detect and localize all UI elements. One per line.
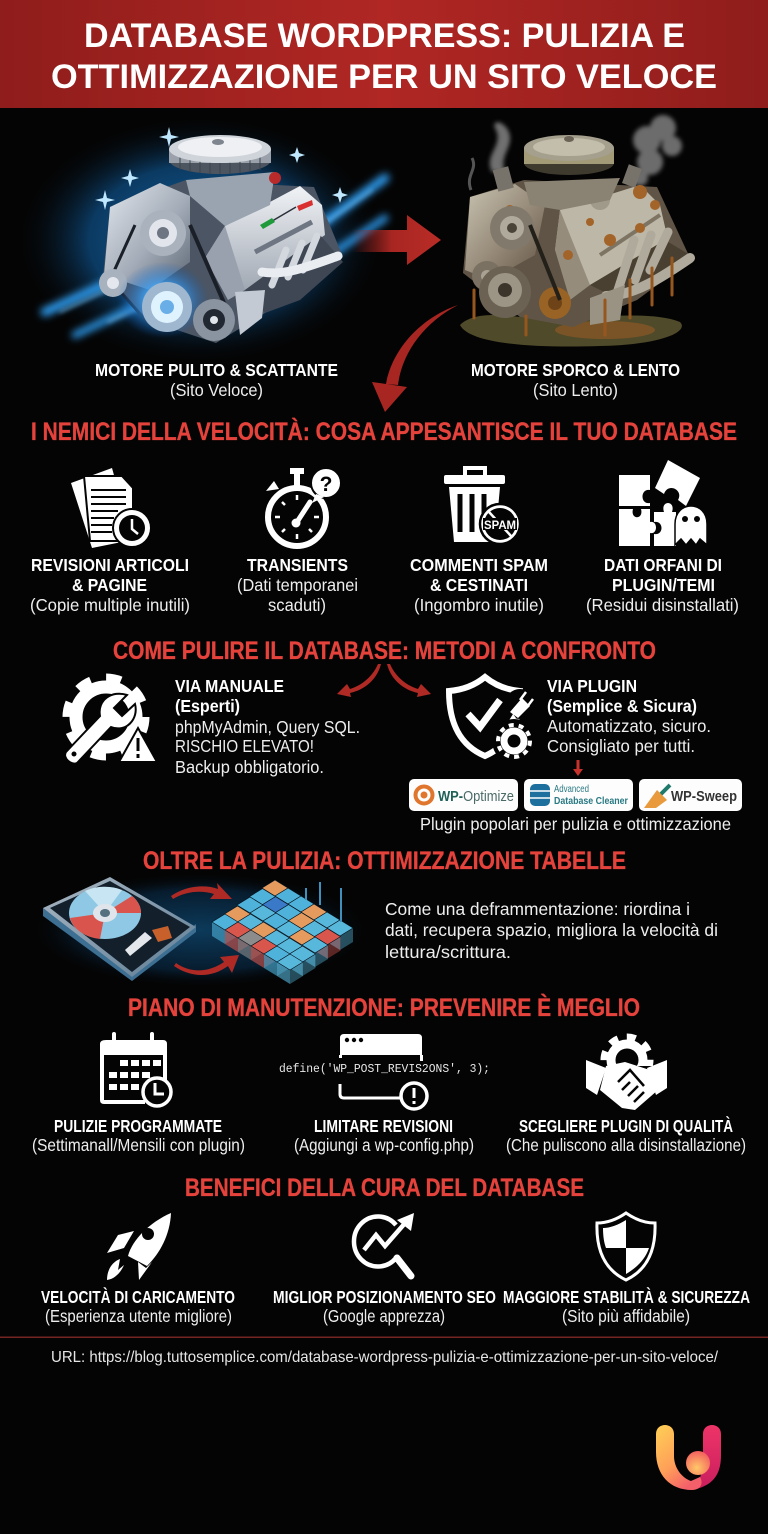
icon: calendar with clock [100, 1034, 171, 1106]
panel: manual method: phpMyAdmin, Query SQL. [175, 717, 360, 737]
panel: scheduled cleaning [32, 1034, 245, 1155]
caption: clean engine [95, 360, 338, 400]
text: defragmentation analogy: lettura/scrittura. [385, 942, 511, 962]
icon: gear and wrench with warning [65, 678, 157, 764]
panel: loading speed: (Esperienza utente migliore) [45, 1306, 232, 1326]
panel: orphan data: (Residui disinstallati) [586, 595, 739, 615]
caption: clean engine: MOTORE PULITO & SCATTANTE [95, 360, 338, 380]
panel: limit revisions [279, 1034, 490, 1155]
hard drive [43, 877, 196, 981]
title banner [0, 0, 768, 108]
icon: rocket [107, 1213, 171, 1280]
title banner: DATABASE WORDPRESS: PULIZIA E [84, 17, 685, 55]
icon: shield with check, plug and gear [449, 677, 536, 763]
heading: cleaning methods: COME PULIRE IL DATABASE: METODI A CONFRONTO [113, 637, 656, 665]
caption: dirty engine: MOTORE SPORCO & LENTO [471, 360, 680, 380]
caption: dirty engine [471, 360, 680, 400]
plugin card: Advanced Database Cleaner: Database Cleaner [554, 795, 628, 807]
panel: SEO: MIGLIOR POSIZIONAMENTO SEO [273, 1287, 496, 1307]
plugin card: WP-Sweep: WP-Sweep [671, 788, 737, 805]
icon: stopwatch with question mark: ? [320, 473, 332, 496]
panel: stability [503, 1213, 750, 1326]
panel: manual method: VIA MANUALE [175, 676, 284, 696]
plugin card: WP-Sweep [639, 779, 742, 811]
caption: clean engine: (Sito Veloce) [170, 380, 263, 400]
panel: orphan data: PLUGIN/TEMI [612, 575, 715, 595]
arrow: lower [174, 955, 239, 975]
arrow: curved down to enemies section [372, 305, 458, 412]
panel: plugin method: Automatizzato, sicuro. [547, 716, 711, 736]
panel: revisions: & PAGINE [72, 575, 147, 595]
arrow: to manual [337, 664, 381, 697]
panel: plugin method: VIA PLUGIN [547, 676, 637, 696]
panel: spam [410, 468, 548, 615]
illustration: hard drive defragmented to blocks [30, 872, 370, 988]
caption: dirty engine: (Sito Lento) [533, 380, 618, 400]
plugin card: WP-Optimize [409, 779, 518, 811]
panel: SEO [273, 1213, 496, 1326]
panel: spam: & CESTINATI [430, 575, 528, 595]
heading: maintenance plan: PIANO DI MANUTENZIONE: PREVENIRE È MEGLIO [128, 993, 640, 1022]
panel: loading speed [41, 1213, 235, 1326]
panel: limit revisions: LIMITARE REVISIONI [314, 1116, 453, 1136]
panel: transients: scaduti) [268, 595, 326, 615]
panel: orphan data [586, 460, 739, 615]
panel: revisions: (Copie multiple inutili) [30, 595, 190, 615]
icon: gear and handshake [586, 1037, 667, 1110]
illustration: clean engine [15, 115, 385, 365]
panel: revisions: REVISIONI ARTICOLI [31, 555, 189, 575]
panel: transients: TRANSIENTS [247, 555, 348, 575]
heading: benefits: BENEFICI DELLA CURA DEL DATABASE [185, 1174, 584, 1202]
icon: documents with clock [71, 468, 151, 548]
icon: browser window with warning [279, 1034, 490, 1109]
illustration: dirty engine [460, 115, 691, 347]
panel: scheduled cleaning: (Settimanall/Mensili con plugin) [32, 1135, 245, 1155]
text: defragmentation analogy: dati, recupera spazio, migliora la velocità di [385, 920, 718, 940]
plugin card: WP-Optimize: WP-Optimize [438, 789, 514, 805]
panel: quality plugins [506, 1037, 746, 1155]
panel: manual method: Backup obbligatorio. [175, 757, 324, 777]
text: defragmentation analogy: Come una deframmentazione: riordina i [385, 899, 690, 919]
panel: stability: (Sito più affidabile) [562, 1306, 690, 1326]
panel: plugin method [449, 676, 711, 763]
arrow: clean to dirty [352, 215, 441, 265]
panel: manual method: (Esperti) [175, 696, 240, 716]
caption: popular plugins: Plugin popolari per pulizia e ottimizzazione [420, 814, 731, 834]
panel: manual method: RISCHIO ELEVATO! [175, 736, 314, 756]
icon: puzzle pieces with ghost [619, 460, 707, 546]
text: defragmentation analogy [385, 899, 718, 962]
source URL: URL: https://blog.tuttosemplice.com/database-wordpress-pulizia-e-ottimizzazione-per-un-sito-veloce/ [51, 1349, 719, 1366]
heading: table optimization: OLTRE LA PULIZIA: OTTIMIZZAZIONE TABELLE [143, 847, 626, 875]
arrow: upper [171, 883, 232, 899]
plugin card: Advanced Database Cleaner [524, 779, 633, 811]
panel: transients: (Dati temporanei [237, 575, 358, 595]
data blocks [212, 880, 353, 984]
panel: limit revisions: (Aggiungi a wp-config.php) [294, 1135, 474, 1155]
panel: manual method [65, 676, 360, 777]
arrow: to plugin logos [573, 760, 583, 776]
icon: checkered shield [597, 1213, 655, 1280]
plugin card: Advanced Database Cleaner: Advanced [554, 784, 589, 795]
code line: define('WP_POST_REVIS2ONS', 3); [279, 1062, 490, 1076]
panel: plugin method: (Semplice & Sicura) [547, 696, 697, 716]
panel: transients [237, 468, 358, 615]
panel: scheduled cleaning: PULIZIE PROGRAMMATE [54, 1116, 222, 1136]
panel: spam: (Ingombro inutile) [414, 595, 544, 615]
icon: magnifier with rising arrow [354, 1213, 414, 1276]
icon: trash can with spam badge: SPAM [484, 518, 516, 532]
panel: loading speed: VELOCITÀ DI CARICAMENTO [41, 1286, 235, 1307]
panel: revisions [30, 468, 190, 615]
panel: SEO: (Google apprezza) [323, 1306, 445, 1326]
panel: plugin method: Consigliato per tutti. [547, 736, 695, 756]
logo [656, 1425, 721, 1490]
panel: orphan data: DATI ORFANI DI [604, 555, 722, 575]
icon: stopwatch with question mark [266, 468, 341, 546]
icon: trash can with spam badge [444, 468, 520, 544]
arrow: to plugin [387, 664, 431, 697]
title banner: OTTIMIZZAZIONE PER UN SITO VELOCE [51, 58, 717, 96]
panel: spam: COMMENTI SPAM [410, 555, 548, 575]
